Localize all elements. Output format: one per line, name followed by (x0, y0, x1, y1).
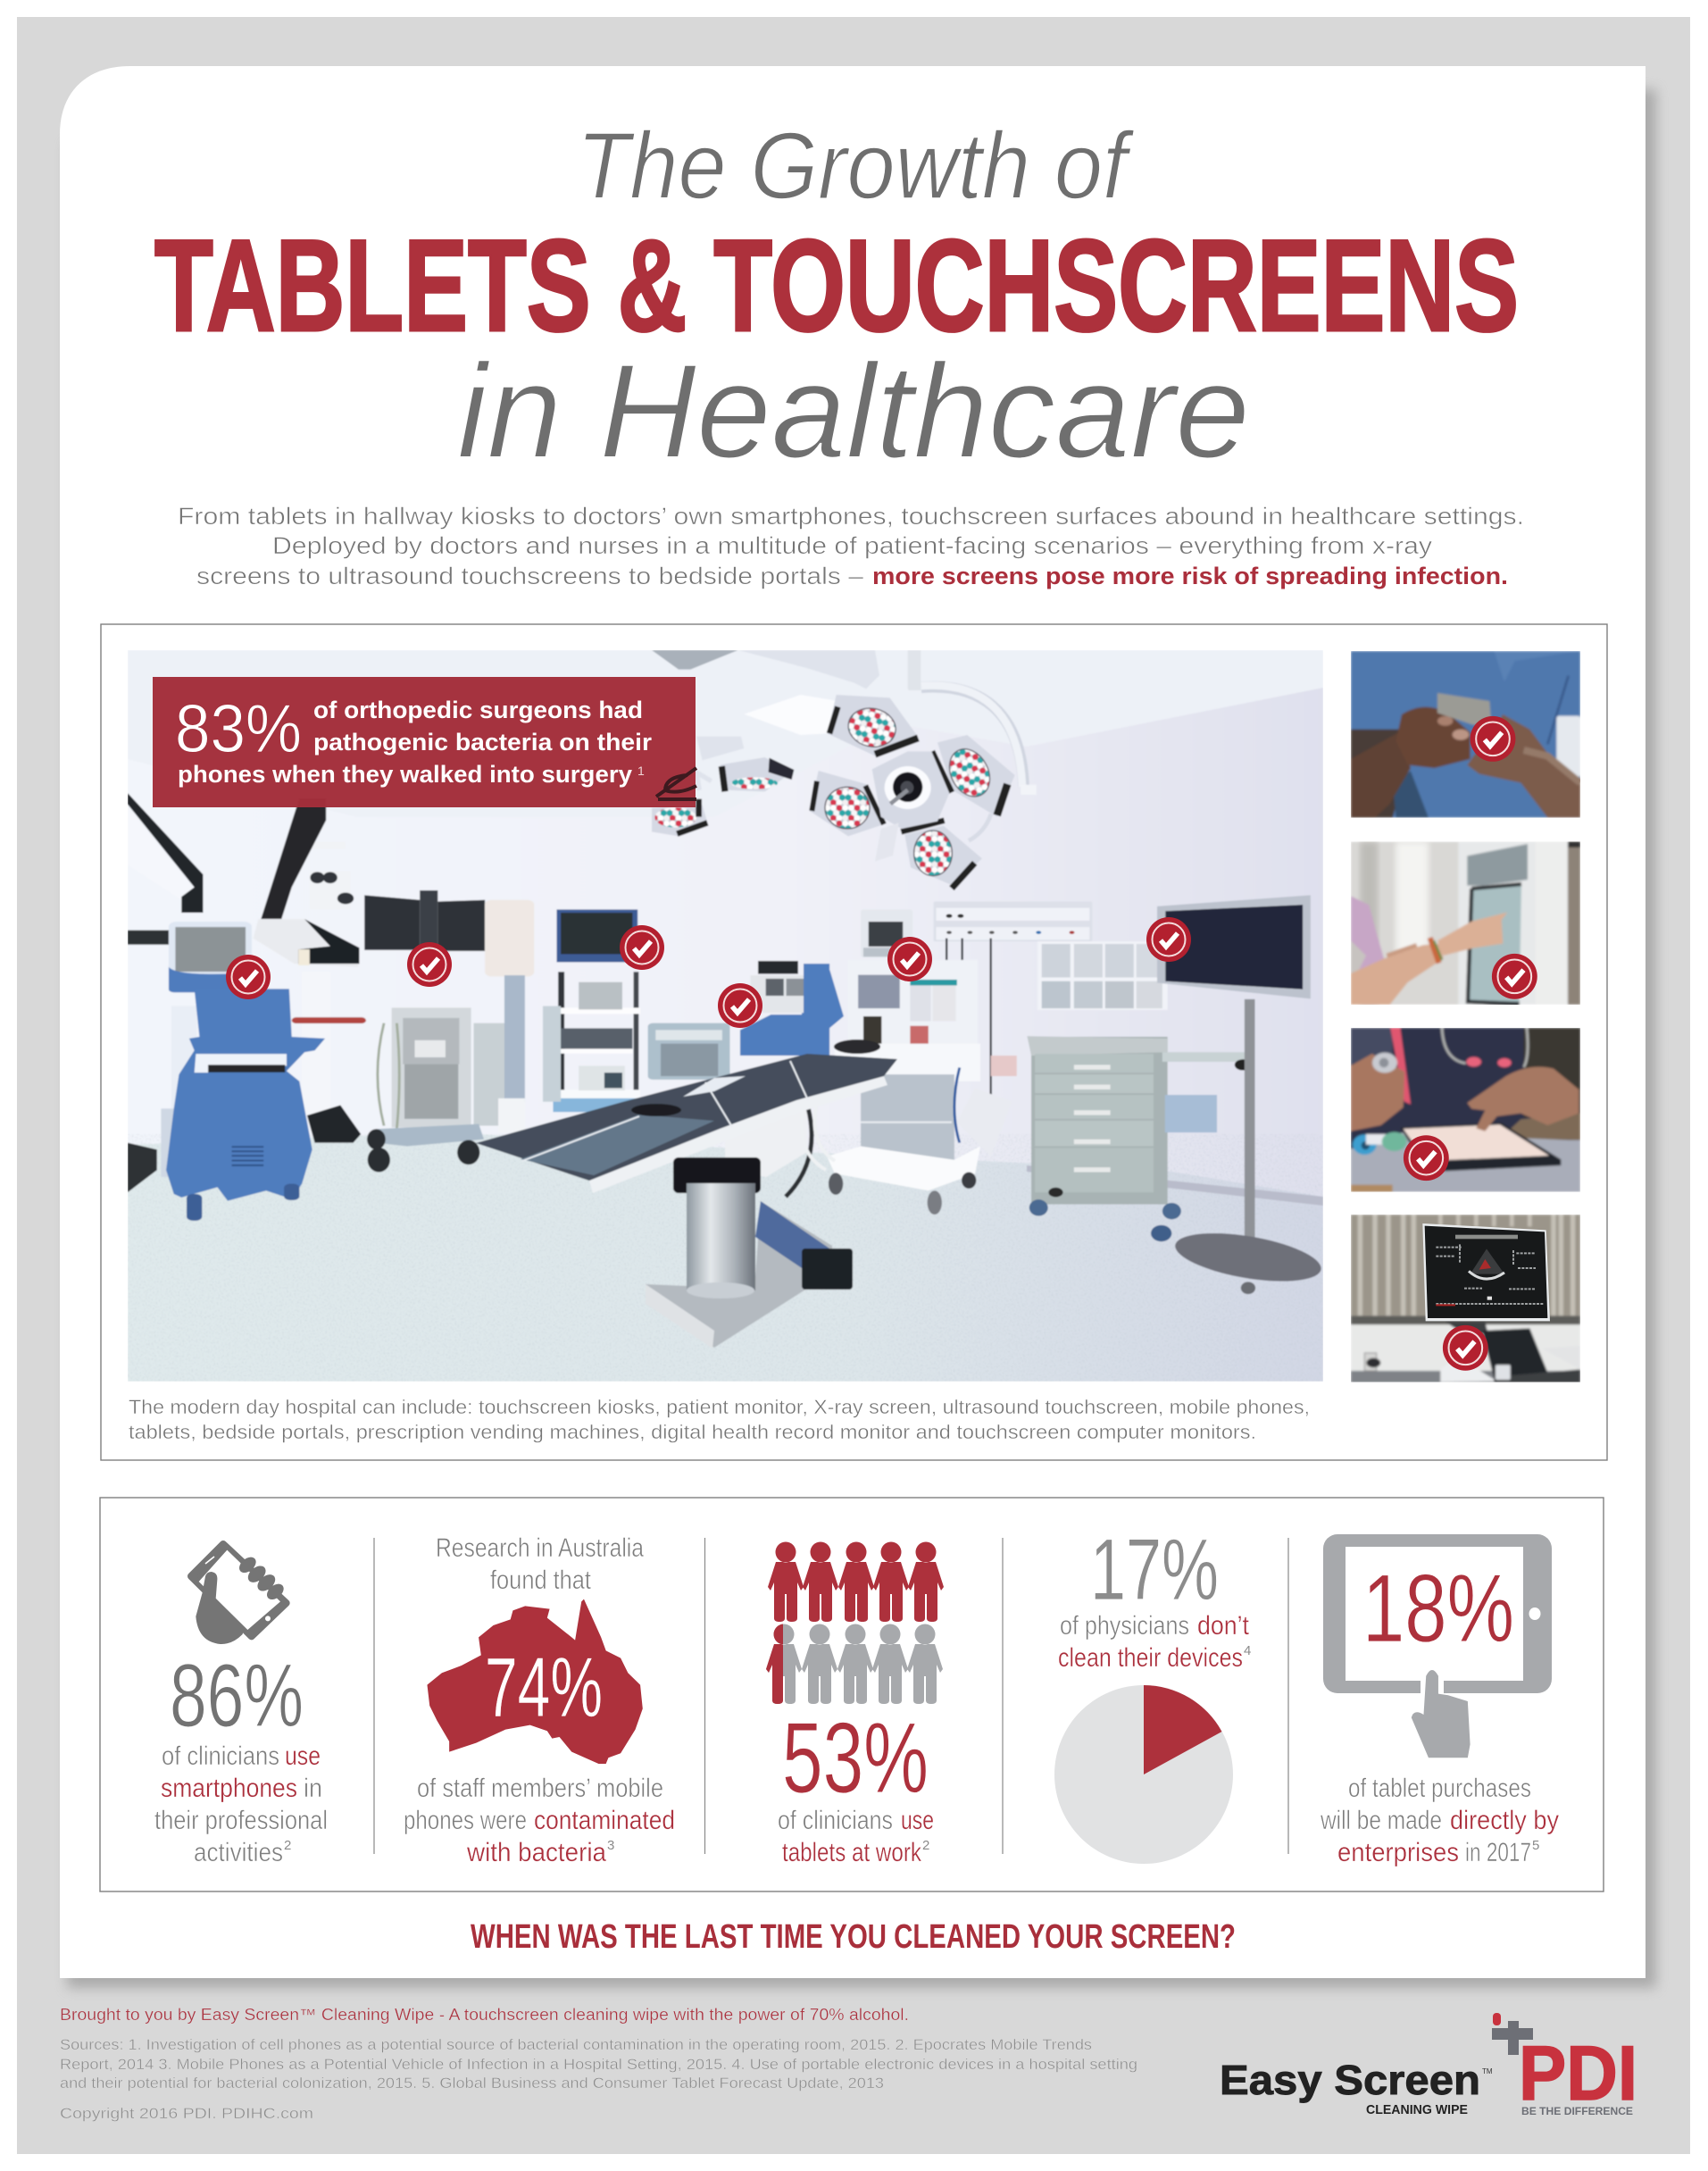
photo: phone in hands (1351, 651, 1580, 818)
title: in Healthcare (457, 336, 1250, 486)
caption (129, 1396, 1310, 1443)
stat: 17% do not clean: of physicians (1060, 1611, 1189, 1641)
stat: 86% smartphones: 2 (284, 1838, 291, 1853)
caption: The modern day hospital can include: touchscreen kiosks, patient monitor, X-ray screen, ultrasound touchscreen, mobile phones, (129, 1396, 1310, 1418)
stat: 17% do not clean: 17% (1090, 1521, 1219, 1618)
stat: 86% smartphones: use (285, 1741, 321, 1771)
stat: 86% smartphones: 86% (170, 1646, 304, 1746)
stat: 18% tablet purchases: will be made (1320, 1806, 1442, 1835)
stat: 18% tablet purchases: 18% (1362, 1554, 1514, 1662)
logo: Easy Screen: TM (1482, 2067, 1493, 2075)
footer: sources: and their potential for bacterial colonization, 2015. 5. Global Business and Consumer Tablet Forecast Update, 2013 (60, 2075, 884, 2092)
stat: 86% smartphones: smartphones (161, 1774, 297, 1803)
stat: 74% contaminated (404, 1533, 675, 1867)
stat: 86% smartphones: in (304, 1774, 322, 1803)
title: The Growth of (577, 113, 1135, 219)
equipment: anesthesia cart, drawers and stand (827, 999, 1329, 1294)
equipment: surgical lights (652, 650, 1037, 889)
stat: 74% contaminated: 74% (485, 1641, 603, 1735)
stat: 18% tablet purchases: in 2017 (1465, 1838, 1531, 1867)
icon: tablet with pointing hand (1323, 1534, 1552, 1758)
stat: 18% tablet purchases: of tablet purchases (1348, 1774, 1531, 1803)
stat: 17% do not clean: 4 (1244, 1643, 1251, 1658)
footer: sources: Report, 2014 3. Mobile Phones as a Potential Vehicle of Infection in a Hospital Setting, 2015. 4. Use of portable electronic devices in a hospital setting (60, 2056, 1137, 2073)
stat: 53% tablets (766, 1541, 944, 1867)
equipment: left machines (128, 961, 844, 1221)
stat: 86% smartphones: activities (194, 1838, 283, 1867)
stat: 17% do not clean (1054, 1521, 1251, 1864)
stat callout: 83%: 83% (175, 691, 302, 767)
equipment: operating table (476, 1040, 897, 1349)
stat: 74% contaminated: phones were (404, 1806, 527, 1835)
markers: check badges on equipment (226, 917, 1191, 1028)
logo: PDI: PDI (1519, 2031, 1637, 2117)
panel: hospital photos (101, 624, 1607, 1460)
logo: Easy Screen: Easy Screen (1220, 2057, 1480, 2103)
icon: row of red people (768, 1541, 944, 1622)
stat: 18% tablet purchases: enterprises (1337, 1838, 1459, 1867)
pie chart: 17 percent (1054, 1685, 1233, 1864)
stat: 86% smartphones: their professional (154, 1806, 328, 1835)
footer: sources: Sources: 1. Investigation of cell phones as a potential source of bacterial contamination in the operating room, 2015. 2. Epocrates Mobile Trends (60, 2036, 1092, 2053)
stat: 86% smartphones (154, 1544, 328, 1867)
stat: 18% tablet purchases: directly by (1450, 1806, 1559, 1835)
stat: 74% contaminated: found that (490, 1566, 592, 1595)
stat: 17% do not clean: clean their devices (1058, 1643, 1243, 1673)
stat: 74% contaminated: of staff members’ mobile (417, 1774, 663, 1803)
stat: 53% tablets: 2 (922, 1838, 929, 1853)
logo: Easy Screen (1220, 2057, 1493, 2117)
footer: sources (60, 2036, 1137, 2092)
logo: PDI: BE THE DIFFERENCE (1521, 2105, 1633, 2117)
logo: PDI (1492, 2013, 1637, 2117)
caption: tablets, bedside portals, prescription vending machines, digital health record monitor and touchscreen computer monitors. (129, 1421, 1256, 1443)
footer: brought to you by: Brought to you by Easy Screen™ Cleaning Wipe - A touchscreen cleaning wipe with the power of 70% alcohol. (60, 2006, 909, 2024)
icon: row of grey people, one part red (766, 1624, 943, 1704)
stat: 74% contaminated: Research in Australia (436, 1533, 644, 1563)
map: Australia (427, 1599, 643, 1764)
equipment: back left, microscope and monitors (128, 793, 637, 992)
stat: 74% contaminated: 3 (607, 1838, 614, 1853)
stat: 53% tablets: use (901, 1806, 934, 1835)
stat: 74% contaminated: with bacteria (466, 1838, 606, 1867)
photo: ultrasound monitor (1351, 1215, 1580, 1382)
stat: 86% smartphones: of clinicians (162, 1741, 279, 1771)
icon: hand holding smartphone (191, 1544, 287, 1644)
stat: 53% tablets: tablets at work (782, 1838, 922, 1867)
intro paragraph: From tablets in hallway kiosks to doctors’ own smartphones, touchscreen surfaces abound in healthcare settings. (178, 503, 1524, 530)
stat callout: 83%: of orthopedic surgeons had (313, 697, 643, 723)
panel: statistics (100, 1498, 1604, 1891)
intro paragraph: screens to ultrasound touchscreens to bedside portals – (196, 563, 863, 589)
intro paragraph (178, 503, 1524, 589)
intro paragraph: Deployed by doctors and nurses in a multitude of patient-facing scenarios – everything from x-ray (272, 532, 1433, 559)
stat: 17% do not clean: don’t (1197, 1611, 1250, 1641)
stat callout: 83%: 1 (637, 764, 645, 778)
stat callout: 83%: pathogenic bacteria on their (313, 729, 653, 756)
stat: 53% tablets: 53% (782, 1702, 929, 1814)
stat: 74% contaminated: contaminated (534, 1806, 675, 1835)
intro paragraph: more screens pose more risk of spreading infection. (872, 563, 1508, 589)
footer: copyright: Copyright 2016 PDI. PDIHC.com (60, 2105, 313, 2122)
call to action: WHEN WAS THE LAST TIME YOU CLEANED YOUR SCREEN? (471, 1918, 1236, 1956)
photo: touchscreen kiosk (1351, 841, 1580, 1005)
stat: 18% tablet purchases (1320, 1534, 1559, 1867)
equipment: right machines, rail and monitor (804, 895, 1311, 1095)
stat callout: 83%: phones when they walked into surgery (178, 761, 632, 788)
stat: 53% tablets: of clinicians (778, 1806, 893, 1835)
logo: Easy Screen: CLEANING WIPE (1366, 2102, 1468, 2117)
photo: operating room (128, 650, 1329, 1382)
stat callout: 83% (153, 677, 696, 807)
title (154, 113, 1519, 486)
stat: 18% tablet purchases: 5 (1532, 1838, 1539, 1853)
photo: tablet on a desk (1351, 1028, 1580, 1192)
